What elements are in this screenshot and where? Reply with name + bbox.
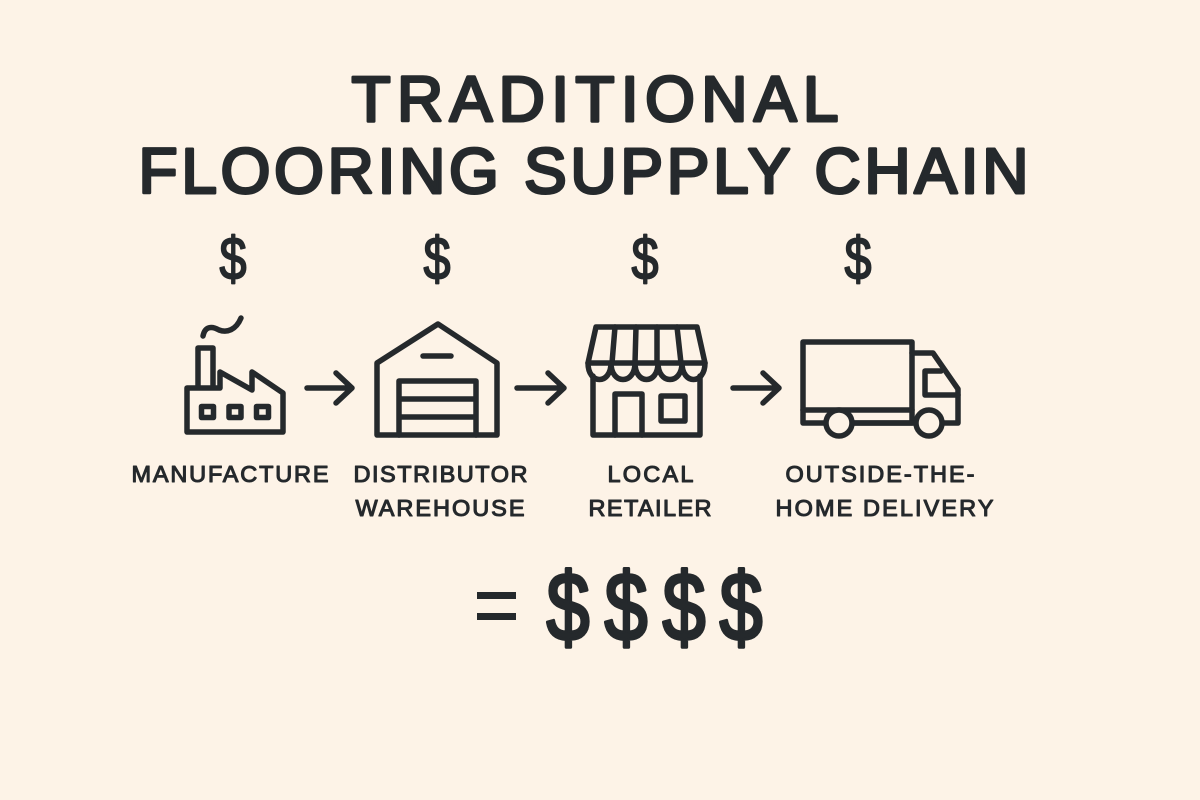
icon: warehouse xyxy=(377,324,497,435)
cost markers: $ xyxy=(844,224,872,292)
cost markers: $ xyxy=(423,224,451,292)
icon: delivery truck xyxy=(803,342,958,436)
title: TRADITIONAL xyxy=(352,63,838,135)
label: outside-the-home delivery xyxy=(776,461,994,521)
total cost: $ xyxy=(719,553,763,661)
arrow: manufacture to distributor xyxy=(307,373,352,403)
total cost: $ xyxy=(604,553,648,661)
cost markers: $ xyxy=(219,224,247,292)
arrow: retailer to delivery xyxy=(733,373,779,403)
label: local retailer: LOCAL xyxy=(608,461,694,487)
label: local retailer: RETAILER xyxy=(588,495,712,521)
label: manufacture: MANUFACTURE xyxy=(132,461,328,487)
total cost xyxy=(477,553,763,661)
label: distributor warehouse: WAREHOUSE xyxy=(356,495,524,521)
title: FLOORING SUPPLY CHAIN xyxy=(138,135,1028,207)
arrow: distributor to retailer xyxy=(517,373,564,403)
icon: store xyxy=(588,327,705,435)
label: local retailer xyxy=(588,461,712,521)
cost markers xyxy=(219,224,872,292)
total cost: $ xyxy=(662,553,706,661)
icon: factory xyxy=(187,318,283,432)
label: outside-the-home delivery: OUTSIDE-THE- xyxy=(786,461,974,487)
label: distributor warehouse xyxy=(354,461,528,521)
total cost: $ xyxy=(546,553,590,661)
label: distributor warehouse: DISTRIBUTOR xyxy=(354,461,528,487)
label: outside-the-home delivery: HOME DELIVERY xyxy=(776,495,994,521)
title xyxy=(138,63,1028,207)
cost markers: $ xyxy=(631,224,659,292)
